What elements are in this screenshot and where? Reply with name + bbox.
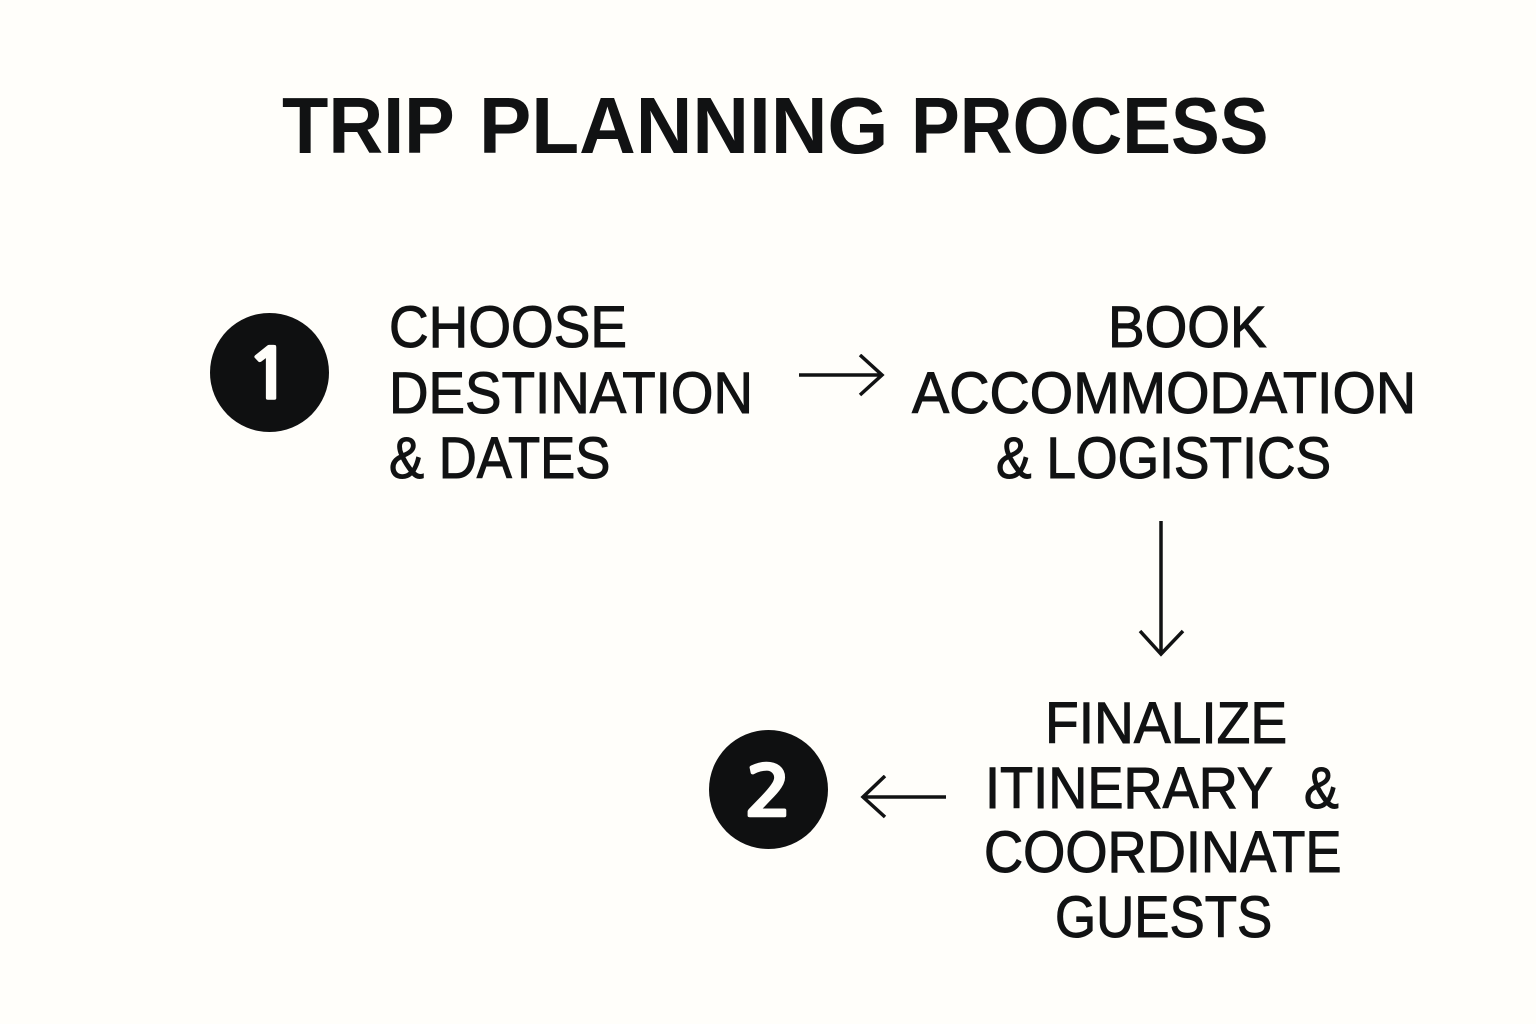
arrow: to step 2 — [860, 775, 946, 818]
text block: choose destination and dates: CHOOSE — [389, 295, 627, 360]
icon: step number 1 — [210, 313, 329, 432]
text block: finalize itinerary and coordinate guests: ITINERARY — [985, 756, 1273, 821]
text block: book accommodation and logistics: ACCOMMODATION — [912, 361, 1416, 426]
title: PLANNING — [479, 81, 888, 170]
title: PROCESS — [911, 81, 1269, 170]
title — [282, 81, 1269, 170]
icon: step number 2 — [709, 730, 828, 849]
text block: finalize itinerary and coordinate guests: FINALIZE — [1045, 691, 1287, 756]
text block: finalize itinerary and coordinate guests: & — [1304, 756, 1339, 821]
title: TRIP — [282, 81, 455, 170]
text block: finalize itinerary and coordinate guests: GUESTS — [1055, 885, 1272, 950]
text block: finalize itinerary and coordinate guests — [984, 691, 1342, 950]
text block: choose destination and dates: DESTINATION — [389, 361, 753, 426]
text block: book accommodation and logistics: & LOGISTICS — [996, 426, 1331, 491]
text block: book accommodation and logistics: BOOK — [1108, 295, 1267, 360]
icon: step number 1: 1 — [245, 341, 294, 410]
text block: finalize itinerary and coordinate guests: COORDINATE — [984, 820, 1342, 885]
arrow: to finalize itinerary — [1138, 521, 1184, 657]
arrow: to book accommodation — [799, 354, 884, 396]
text block: book accommodation and logistics — [911, 295, 1416, 491]
text block: choose destination and dates — [389, 295, 753, 491]
icon: step number 2: 2 — [744, 758, 793, 827]
text block: choose destination and dates: & DATES — [389, 426, 610, 491]
